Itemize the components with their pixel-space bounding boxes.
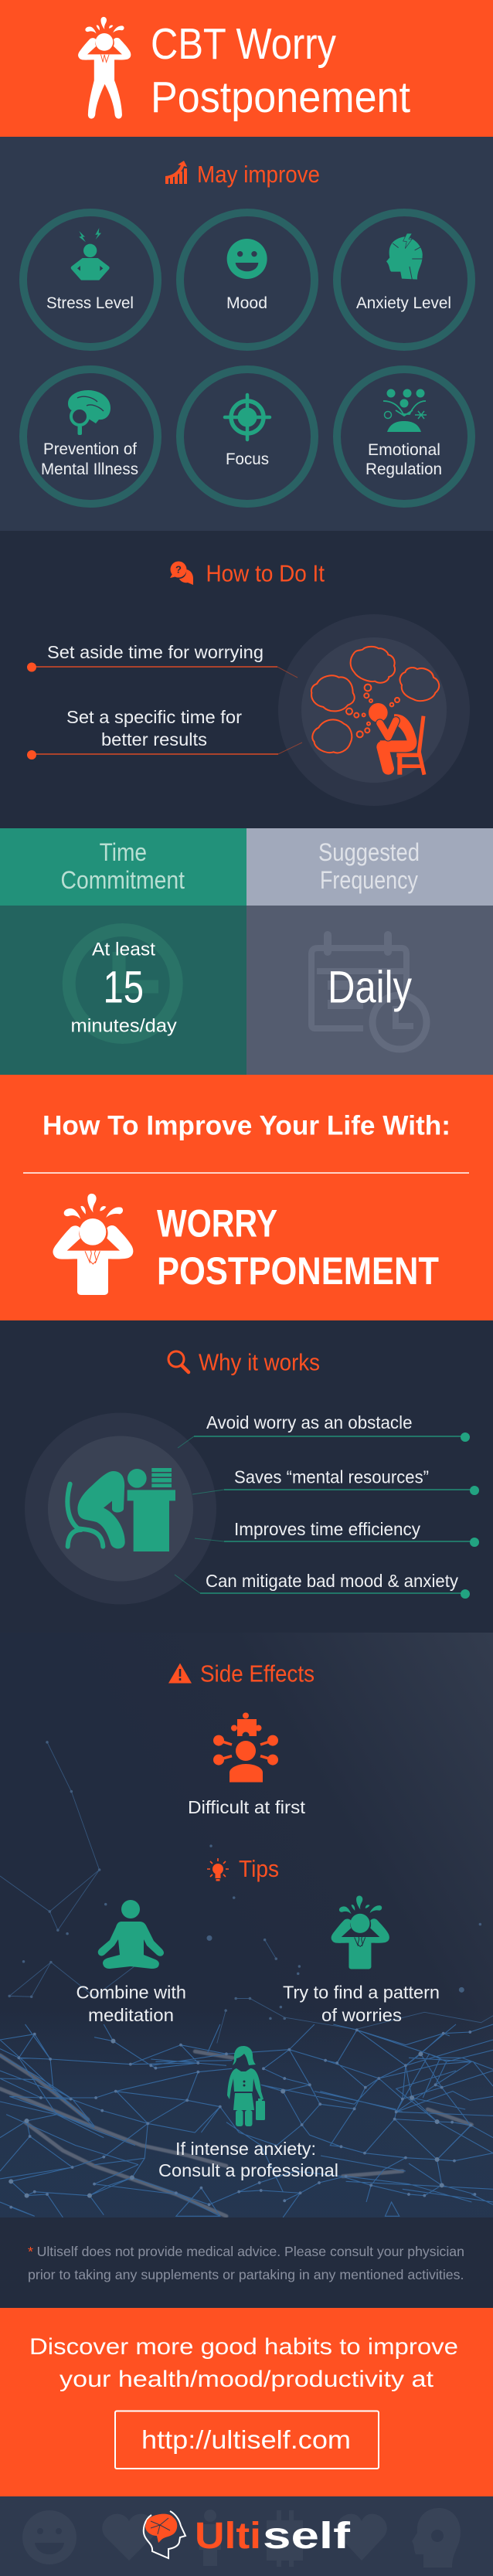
heading: suggested frequency: Suggested	[318, 838, 420, 866]
value: 15 minutes per day: minutes/day	[71, 1016, 177, 1037]
heading: time commitment: Time	[100, 838, 147, 866]
title: CBT Worry	[151, 19, 336, 69]
label: emotional regulation	[366, 441, 442, 478]
callout: saves mental resources	[192, 1466, 479, 1495]
background network lower	[0, 2024, 493, 2217]
icon: brain with magnifier	[68, 390, 110, 435]
button: url	[115, 2411, 379, 2469]
panel: call to action	[0, 2308, 493, 2496]
heading: may improve: May improve	[197, 161, 320, 188]
logo: ultiself	[144, 2511, 351, 2558]
faint footer icons	[22, 2508, 461, 2568]
text: combine with meditation: Combine with	[76, 1983, 186, 2003]
icon: person slumped at desk	[67, 1468, 175, 1551]
heading: how to improve: How To Improve Your Life With:	[42, 1111, 450, 1141]
text: discover more	[29, 2334, 458, 2392]
heading: tips	[207, 1855, 279, 1882]
heading: time commitment: Commitment	[60, 866, 185, 894]
button: url: http://ultiself.com	[141, 2425, 351, 2454]
heading: worry postponement	[157, 1202, 439, 1293]
text: combine with meditation: meditation	[88, 2005, 174, 2025]
text: find a pattern: Try to find a pattern	[283, 1983, 440, 2003]
label: mood: Mood	[226, 294, 267, 312]
heading: tips: Tips	[239, 1855, 279, 1882]
icon: emotional regulation	[383, 389, 427, 432]
value: 15 minutes per day	[71, 940, 177, 1037]
text: consult a professional	[158, 2139, 338, 2180]
text: disclaimer: Ultiself does not provide medical advice. Please consult your physician	[37, 2244, 464, 2259]
heading: why it works: Why it works	[199, 1349, 320, 1376]
heading: suggested frequency	[318, 838, 420, 894]
heading: worry postponement: POSTPONEMENT	[157, 1249, 439, 1293]
panel: may improve	[0, 137, 493, 531]
callout: set specific time: better results	[101, 729, 207, 749]
callout: improves time efficiency: Improves time efficiency	[234, 1519, 420, 1539]
value: 15 minutes per day: 15	[104, 963, 144, 1012]
icon: mood	[227, 239, 267, 279]
panel: header	[0, 0, 493, 137]
callout: avoid worry: Avoid worry as an obstacle	[206, 1412, 413, 1432]
heading: how to do it: ?	[175, 564, 182, 575]
label: stress level: Stress Level	[46, 294, 134, 312]
heading: worry postponement: WORRY	[157, 1202, 277, 1246]
value: 15 minutes per day: At least	[92, 940, 155, 960]
desk figure backdrop	[25, 1412, 216, 1604]
title: Postponement	[151, 73, 410, 122]
icon: person with puzzle	[213, 1712, 278, 1782]
callout: set specific time	[27, 707, 302, 760]
label: emotional regulation: Regulation	[366, 460, 442, 478]
text: difficult at first: Difficult at first	[188, 1797, 306, 1817]
text: discover more: your health/mood/productivity at	[60, 2367, 434, 2392]
callout: set specific time: Set a specific time for	[66, 707, 242, 727]
heading: time commitment	[60, 838, 185, 894]
title	[151, 19, 410, 122]
icon: faint clock	[69, 930, 176, 1037]
label: prevention of mental illness: Prevention of	[43, 440, 137, 458]
text: disclaimer: prior to taking any supplements or partaking in any mentioned activities.	[28, 2267, 464, 2282]
background network upper	[0, 1742, 493, 2044]
callout: improves time efficiency	[195, 1519, 479, 1547]
icon: professional woman	[227, 2046, 265, 2126]
panel: side effects and tips	[0, 1633, 493, 2217]
callout: set aside time: Set aside time for worrying	[47, 642, 264, 662]
panel: time commitment	[0, 828, 246, 1075]
text: discover more: Discover more good habits to improve	[29, 2334, 458, 2360]
panel: how to do it	[0, 531, 493, 828]
label: prevention of mental illness	[41, 440, 138, 478]
panel: why it works	[0, 1320, 493, 1633]
panel: footer	[0, 2496, 493, 2576]
icon: worried man	[53, 1194, 133, 1295]
heading: side effects: Side Effects	[200, 1660, 314, 1687]
icon: stress level	[71, 228, 110, 280]
callout: set aside time	[27, 642, 298, 678]
thinking figure backdrop	[278, 614, 470, 806]
label: prevention of mental illness: Mental Illness	[41, 460, 138, 478]
icon: meditation	[98, 1900, 164, 1969]
text: consult a professional: Consult a professional	[158, 2160, 338, 2180]
text: consult a professional: If intense anxiety:	[175, 2139, 316, 2159]
label: anxiety level: Anxiety Level	[356, 294, 451, 312]
callout: saves mental resources: Saves “mental resources”	[234, 1466, 429, 1487]
panel: how to improve banner	[0, 1075, 493, 1320]
label: focus: Focus	[226, 450, 269, 468]
callout: mitigate bad mood: Can mitigate bad mood & anxiety	[206, 1571, 458, 1591]
text: find a pattern: of worries	[321, 2005, 402, 2025]
icon: anxiety head	[386, 233, 423, 280]
heading: how to do it: How to Do It	[206, 559, 325, 587]
callout: avoid worry	[178, 1412, 470, 1448]
heading: suggested frequency: Frequency	[320, 866, 418, 894]
rings	[23, 212, 471, 504]
callout: mitigate bad mood	[175, 1571, 470, 1599]
text: disclaimer	[28, 2244, 464, 2282]
icon: focus target	[225, 395, 270, 440]
text: combine with meditation	[76, 1983, 186, 2025]
label: emotional regulation: Emotional	[368, 441, 440, 459]
panel: suggested frequency	[246, 828, 493, 1075]
text: find a pattern	[283, 1983, 440, 2025]
icon: faint calendar with clock	[311, 935, 427, 1049]
logo: ultiself: Ulti	[195, 2516, 261, 2557]
value: daily: Daily	[328, 963, 412, 1012]
text: disclaimer: *	[28, 2244, 33, 2259]
icon: worried man full body	[78, 17, 131, 119]
panel: disclaimer	[0, 2217, 493, 2308]
logo: ultiself: self	[263, 2516, 351, 2557]
icon: worried person with thought clouds	[311, 647, 439, 775]
icon: worried man green	[332, 1896, 389, 1969]
